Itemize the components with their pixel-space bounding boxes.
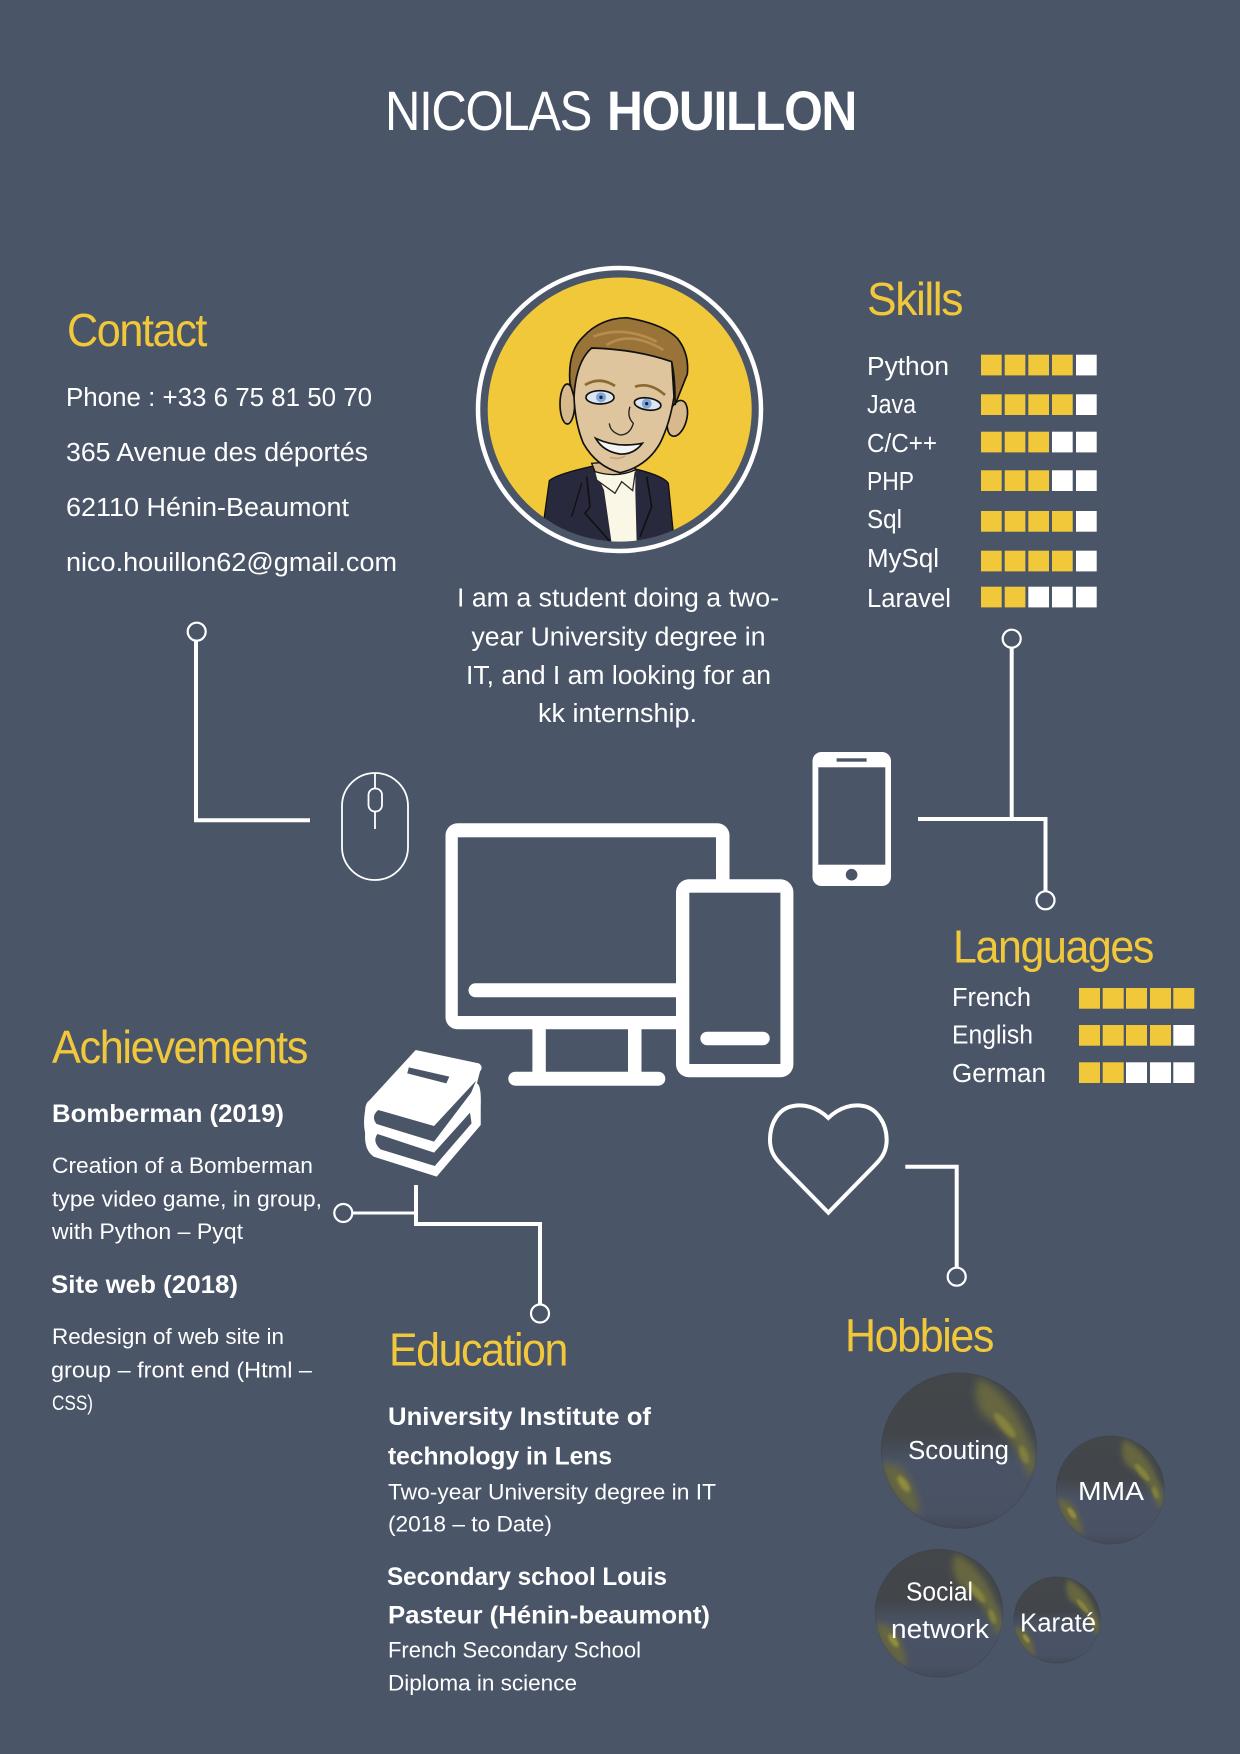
bubble: mma: [1055, 1436, 1165, 1544]
icon: phone: [812, 752, 891, 886]
education: university: technology in Lens: [388, 1442, 612, 1470]
icon: books: [364, 1050, 482, 1177]
contact details: [66, 384, 397, 577]
skill rating squares: [981, 355, 1097, 607]
achievement: bomberman: with Python – Pyqt: [51, 1219, 244, 1244]
intro text: kk internship.: [538, 700, 697, 728]
education: secondary school: [387, 1563, 710, 1696]
skill labels: [867, 353, 951, 613]
bubble: social network: network: [891, 1616, 989, 1644]
connector: skills to phone and languages: [918, 630, 1054, 909]
contact details: 62110 Hénin-Beaumont: [66, 494, 349, 522]
contact details: 365 Avenue des déportés: [66, 439, 368, 467]
panel: skills: [867, 273, 1097, 613]
contact details: Phone : +33 6 75 81 50 70: [66, 384, 372, 412]
icon: desktop monitor and tablet: [446, 823, 793, 1086]
education: secondary school: French Secondary School: [388, 1638, 641, 1662]
skill labels: MySql: [867, 545, 939, 573]
connector: heart to hobbies: [905, 1167, 966, 1286]
heading: contact: Contact: [67, 304, 208, 356]
education: secondary school: Pasteur (Hénin-beaumont): [388, 1602, 710, 1630]
language labels: English: [952, 1022, 1033, 1050]
contact details: nico.houillon62@gmail.com: [66, 549, 397, 577]
skill labels: PHP: [867, 468, 914, 496]
portrait avatar: [478, 268, 761, 551]
bubble: mma: MMA: [1078, 1478, 1144, 1506]
intro text: I am a student doing a two-: [457, 584, 779, 612]
connector: contact to mouse: [188, 623, 310, 820]
skill labels: Sql: [867, 506, 902, 534]
bubble: scouting: [880, 1372, 1038, 1529]
intro text: year University degree in: [472, 624, 766, 652]
language rating squares: [1079, 988, 1194, 1083]
heading: hobbies: Hobbies: [845, 1310, 993, 1362]
language labels: French: [952, 984, 1031, 1012]
achievement: site web: Redesign of web site in: [52, 1324, 284, 1349]
heading: skills: Skills: [867, 273, 962, 325]
title: HOUILLON: [607, 79, 856, 142]
icon: mouse: [342, 773, 408, 880]
skill labels: Java: [867, 391, 917, 419]
skill labels: Laravel: [867, 585, 951, 613]
intro text: IT, and I am looking for an: [466, 662, 771, 690]
achievement: bomberman: Bomberman (2019): [52, 1100, 284, 1128]
panel: languages: [952, 920, 1194, 1088]
title: NICOLAS: [385, 79, 591, 142]
education: secondary school: Diploma in science: [388, 1670, 577, 1696]
achievement: site web: Site web (2018): [51, 1271, 238, 1299]
connector: achievements to books and education: [334, 1185, 549, 1322]
achievement: bomberman: Creation of a Bomberman: [52, 1153, 313, 1178]
education: university: [388, 1403, 716, 1536]
bubble: karate: Karaté: [1020, 1610, 1096, 1638]
panel: achievements: [51, 1021, 322, 1415]
achievement: site web: CSS): [52, 1392, 93, 1415]
heading: languages: Languages: [953, 920, 1153, 972]
title: [385, 79, 856, 142]
bubble: social network: Social: [906, 1578, 973, 1606]
education: university: Two-year University degree in IT: [388, 1480, 716, 1504]
bubble: karate: [1013, 1576, 1101, 1664]
language labels: German: [952, 1060, 1046, 1088]
panel: contact: [66, 304, 397, 577]
language labels: [952, 984, 1046, 1088]
intro text: [457, 584, 779, 728]
education: university: University Institute of: [388, 1403, 652, 1431]
education: university: (2018 – to Date): [388, 1512, 552, 1536]
achievement: site web: group – front end (Html –: [51, 1358, 312, 1382]
heading: education: Education: [389, 1324, 567, 1376]
panel: education: [387, 1324, 716, 1696]
bubble: scouting: Scouting: [908, 1437, 1009, 1465]
achievement: bomberman: type video game, in group,: [52, 1186, 322, 1212]
skill labels: Python: [867, 353, 949, 381]
panel: hobbies: [845, 1310, 1165, 1678]
icon: heart: [770, 1105, 887, 1213]
heading: achievements: Achievements: [52, 1021, 307, 1073]
monitor: [446, 823, 730, 1086]
skill labels: C/C++: [867, 430, 937, 458]
bubble: social network: [874, 1549, 1004, 1678]
education: secondary school: Secondary school Louis: [387, 1563, 667, 1591]
achievement: bomberman: [51, 1100, 322, 1244]
achievement: site web: [51, 1271, 312, 1415]
tablet: [676, 879, 793, 1077]
